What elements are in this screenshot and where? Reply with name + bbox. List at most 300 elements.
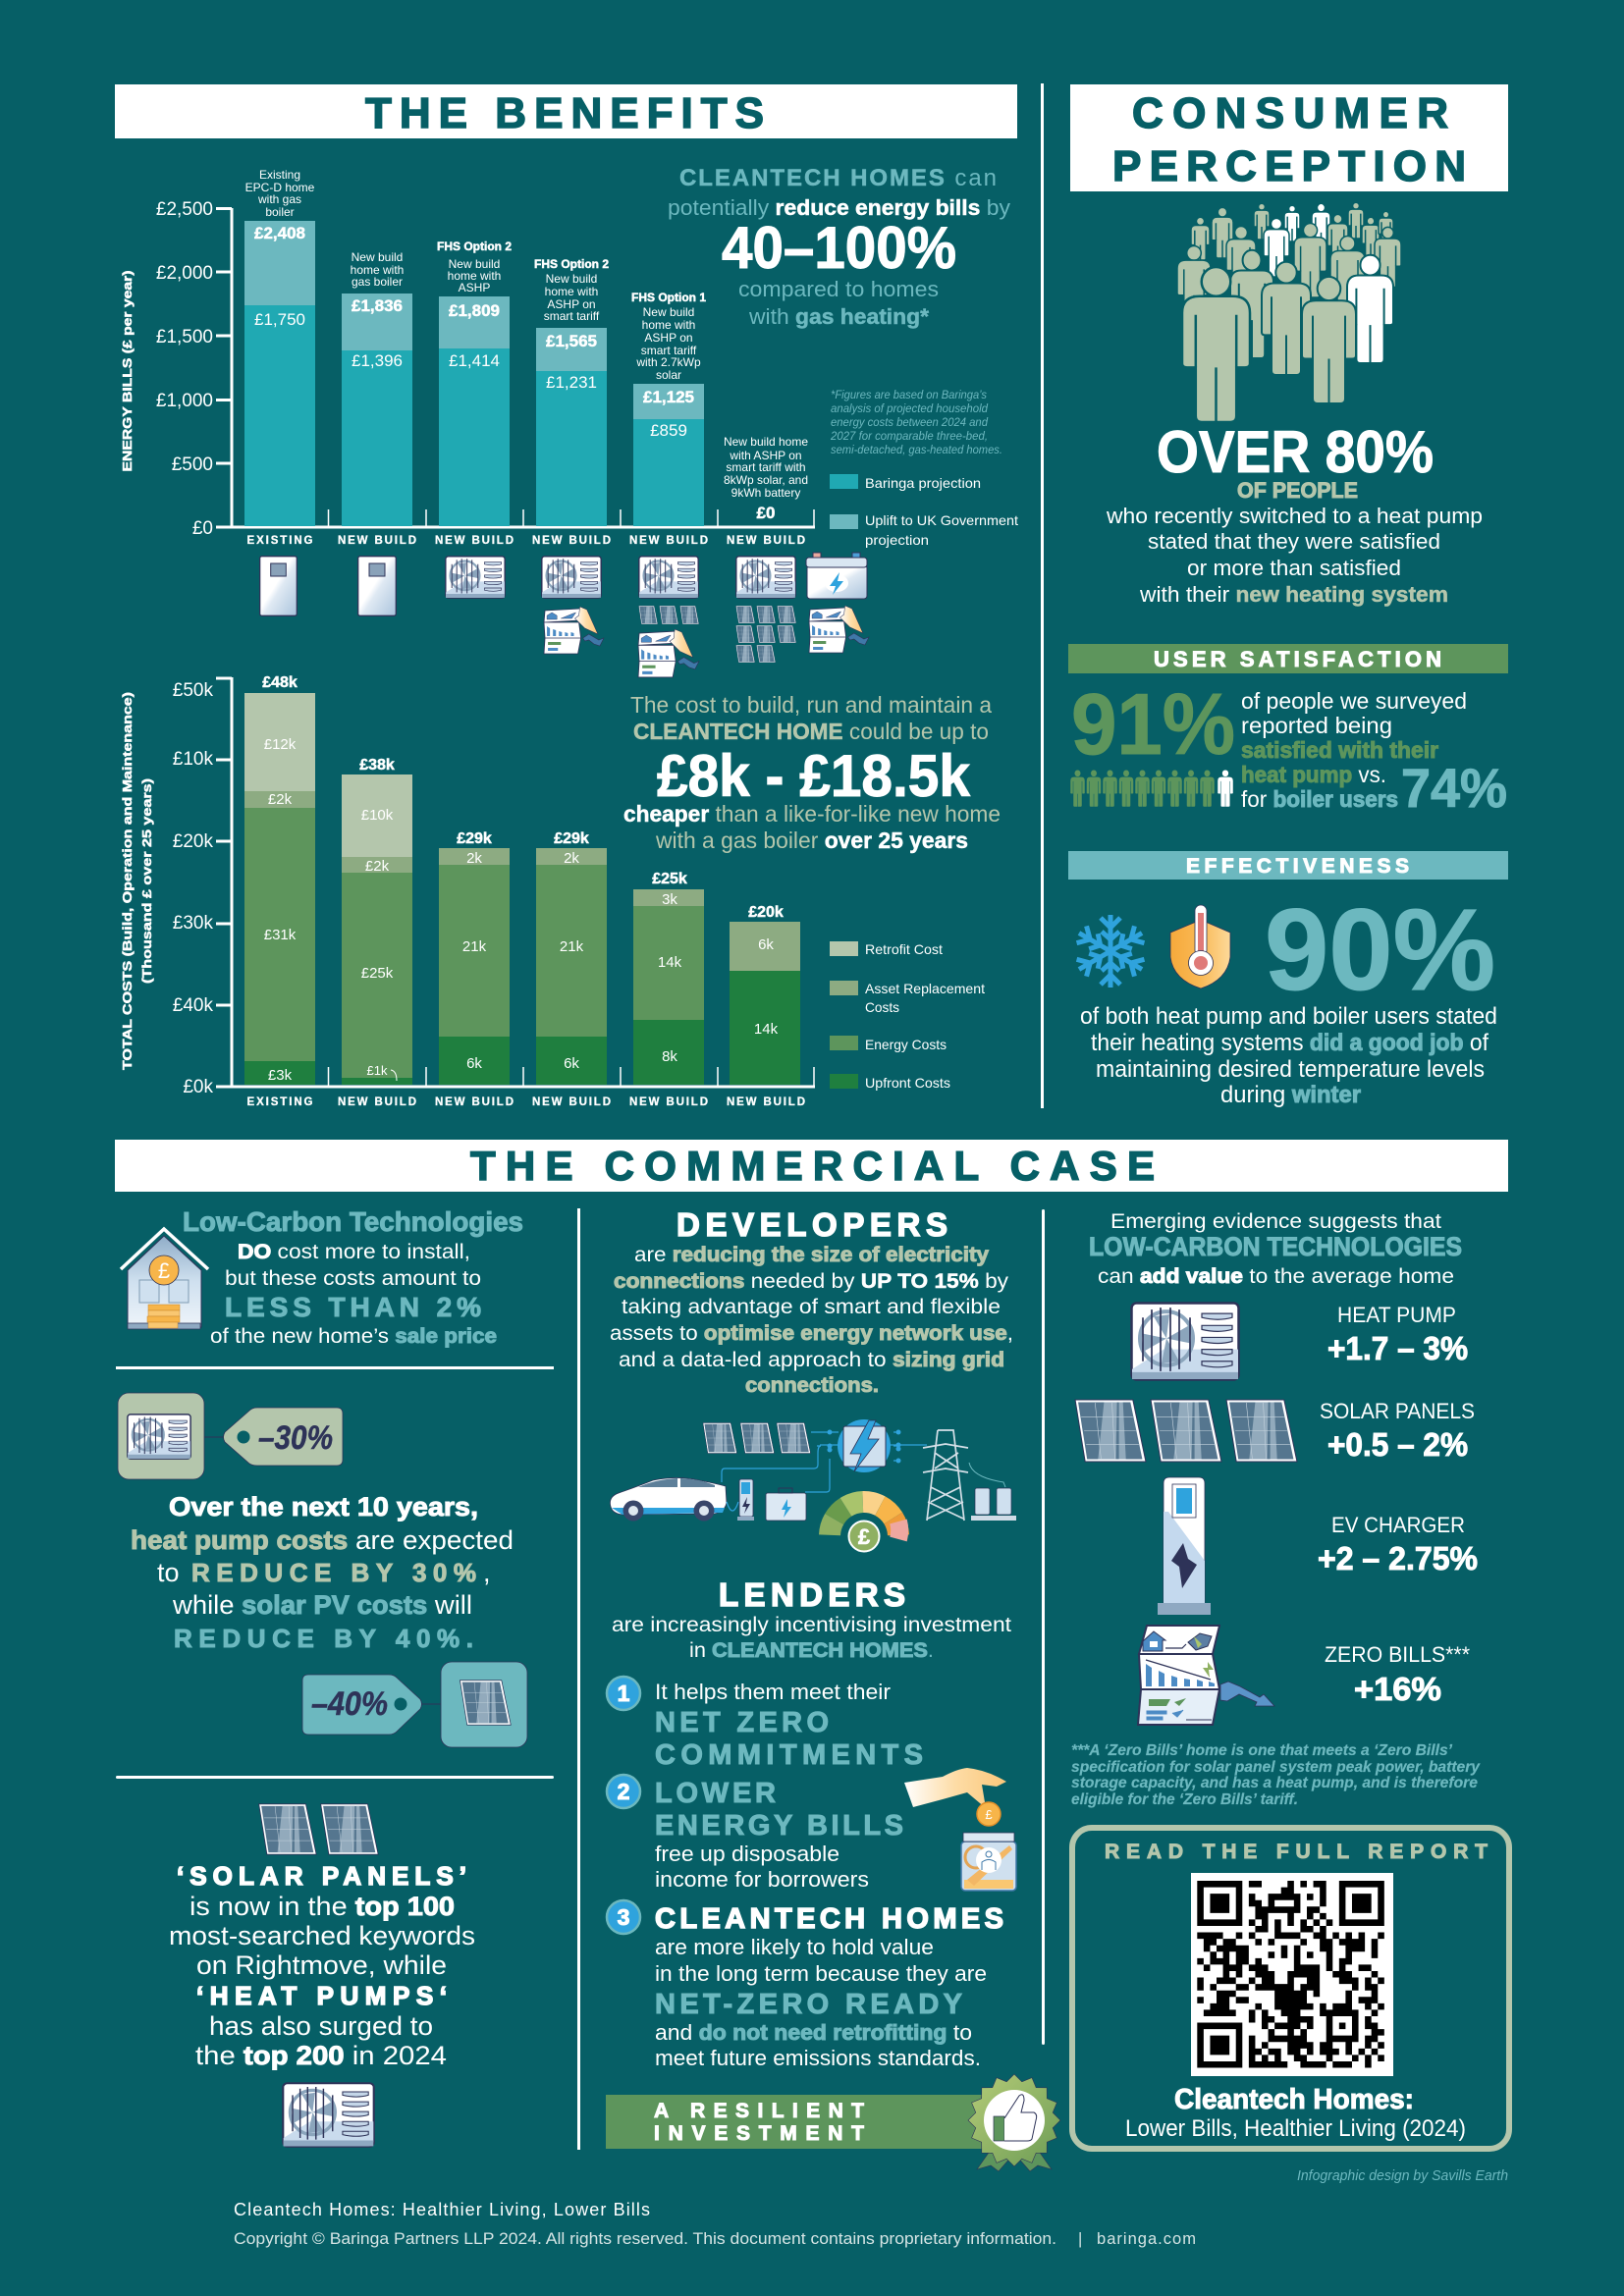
legend: energy bills: Baringa projection [865, 475, 981, 491]
heading: read the full report: READ THE FULL REPORT [1105, 1841, 1488, 1863]
text block: developers: and a data-led approach to sizing grid [619, 1349, 1004, 1371]
text block: low-carbon technologies cost: of the new home’s sale price [210, 1325, 497, 1348]
icon: price tag minus 40 [302, 1675, 441, 1735]
stat: over 80 percent [1106, 419, 1483, 607]
panel: read the full report [1072, 1828, 1509, 2149]
heading: consumer perception [1070, 84, 1508, 191]
bar: existing: £2,408 [254, 224, 305, 242]
bar captions: solar [656, 368, 681, 382]
heading: the commercial case [115, 1140, 1508, 1192]
column: developers and lenders [606, 1206, 1060, 2171]
list item 2: lower energy bills: LOWER [655, 1778, 776, 1809]
x axis labels: NEW BUILD [629, 1096, 708, 1108]
x axis labels: EXISTING [247, 535, 313, 547]
bar captions: FHS Option 2 [437, 240, 512, 253]
text block: rightmove search: is now in the top 100 [189, 1892, 455, 1921]
bar captions: 9kWh battery [731, 486, 800, 500]
icon: savings jar [961, 1833, 1016, 1891]
text block: developers: connections. [745, 1374, 879, 1397]
text block: rightmove search: ‘HEAT PUMPS‘ [196, 1981, 447, 2010]
icon: solar row bar 5 [639, 606, 699, 624]
y axis labels [173, 680, 213, 1097]
footer: Copyright © Baringa Partners LLP 2024. All rights reserved. This document contains proprietary information. [234, 2230, 1056, 2248]
text block: surveyed satisfaction: satisfied with their [1241, 737, 1438, 763]
bar segment values: £1k [367, 1063, 388, 1078]
icon: smart tariff bill 5 [638, 629, 699, 677]
x axis labels: NEW BUILD [727, 1096, 805, 1108]
stat: over 80 percent: with their new heating system [1139, 582, 1448, 607]
stacked bar: new build 1 [342, 774, 412, 1085]
text block: over next 10 years: REDUCE BY 30% [191, 1558, 476, 1587]
text block: cost to build: The cost to build, run and maintain a [630, 692, 992, 718]
bar captions: ASHP on [644, 331, 693, 345]
item: ev charger value [1158, 1477, 1478, 1615]
report title: Lower Bills, Healthier Living (2024) [1125, 2115, 1466, 2142]
bar captions: New build [546, 272, 597, 286]
bar totals: £48k [262, 674, 298, 691]
y axis labels: £50k [173, 680, 213, 701]
text block: developers: are reducing the size of electricity [634, 1244, 989, 1266]
text block: developers: DEVELOPERS [677, 1206, 947, 1243]
item: ev charger value: EV CHARGER [1331, 1513, 1465, 1537]
bar totals: £25k [652, 871, 687, 887]
icon: ten people row [1070, 770, 1233, 807]
footnote: figures basis: 2027 for comparable three-bed, [830, 431, 988, 443]
bar captions: 8kWp solar, and [724, 473, 808, 487]
bar: new build zero: £0 [757, 504, 775, 522]
icon: solar array bar 6 [736, 606, 796, 663]
panel: consumer perception [1068, 84, 1508, 1108]
y axis labels: £1,000 [156, 391, 213, 411]
y axis labels: £20k [173, 831, 213, 852]
list item 2: lower energy bills: ENERGY BILLS [655, 1810, 903, 1842]
stat: over 80 percent: stated that they were satisfied [1148, 529, 1440, 554]
list item 3: hold value: CLEANTECH HOMES [655, 1903, 1003, 1935]
icon: transformers [971, 1488, 1016, 1521]
footnote: zero bills definition: specification for solar panel system peak power, battery [1071, 1759, 1481, 1776]
y axis labels: £40k [173, 995, 213, 1016]
icon: tariff gauge: £ [858, 1524, 871, 1549]
text block: emerging evidence [1089, 1210, 1462, 1288]
banner: a resilient investment: A RESILIENT [654, 2100, 864, 2122]
report title: Cleantech Homes: [1174, 2084, 1414, 2115]
icon: battery [806, 553, 867, 599]
axes [216, 208, 815, 527]
text block: reduce energy bills: CLEANTECH HOMES can [679, 165, 997, 191]
stacked bar: new build 2 [439, 848, 510, 1085]
bar: existing: £1,750 [254, 310, 305, 329]
footnote: figures basis: semi-detached, gas-heated homes. [831, 445, 1002, 456]
footnote: zero bills definition: storage capacity, and has a heat pump, and is therefore [1071, 1775, 1478, 1791]
bar captions: New build [352, 250, 403, 264]
list item 1: net zero commitments: COMMITMENTS [655, 1739, 923, 1771]
text block: cost to build: £8k - £18.5k [657, 743, 971, 809]
divider top [1041, 83, 1044, 1108]
icon: thumbs-up rosette [968, 2074, 1060, 2171]
item: heat pump value [1131, 1303, 1468, 1379]
text block: low-carbon technologies cost: DO cost more to install, [238, 1241, 470, 1263]
list item 2: lower energy bills: free up disposable [655, 1842, 839, 1866]
bar: new build ASHP smart tariff solar: £1,125 [643, 388, 694, 406]
subheading: user satisfaction: USER SATISFACTION [1154, 647, 1441, 671]
y axis labels: £0k [183, 1077, 213, 1097]
bar segment values: 6k [758, 936, 774, 953]
text block: rightmove search: the top 200 in 2024 [195, 2041, 447, 2070]
text block: lenders: LENDERS [719, 1576, 905, 1613]
bar: existing [244, 221, 315, 526]
bar captions: smart tariff [641, 344, 697, 357]
y axis labels: £0 [192, 518, 213, 539]
stacked bar: existing [244, 693, 315, 1085]
icon: price tag minus 30: –30% [258, 1419, 333, 1457]
chart: energy bills bar chart [120, 168, 815, 547]
icons: technology under each bar [260, 553, 869, 677]
icon: snowflake [1074, 915, 1147, 988]
stat: over 80 percent: who recently switched to a heat pump [1106, 504, 1483, 528]
text block: did a good job: their heating systems did a good job of [1091, 1030, 1489, 1056]
footer: | [1078, 2230, 1082, 2248]
item: zero bills value [1138, 1626, 1470, 1725]
y axis labels: £30k [173, 913, 213, 934]
stacked bar: new build 4 [633, 889, 704, 1085]
panel: the benefits [115, 84, 1018, 1108]
footnote: figures basis: *Figures are based on Baringa’s [831, 390, 987, 401]
item: heat pump value: +1.7 – 3% [1327, 1330, 1468, 1366]
legend: energy bills [830, 474, 1018, 548]
list item 2: lower energy bills [607, 1775, 903, 1892]
stat: 91 percent: 91% [1071, 675, 1235, 773]
list item 3: hold value: in the long term because they are [655, 1961, 987, 1986]
stat: over 80 percent: OF PEOPLE [1237, 478, 1358, 503]
report title [1125, 2084, 1466, 2142]
bar captions: ASHP on [547, 297, 596, 311]
bar totals: £20k [748, 904, 784, 921]
item: solar panels value [1075, 1399, 1475, 1463]
footnote: figures basis [830, 390, 1002, 456]
item: zero bills value: +16% [1354, 1671, 1441, 1707]
y axis title: TOTAL COSTS (Build, Operation and Maintenance) [120, 692, 135, 1070]
footnote: zero bills definition: ***A ‘Zero Bills’ home is one that meets a ‘Zero Bills’ [1071, 1742, 1453, 1759]
icon: battery [766, 1488, 806, 1521]
footnote: zero bills definition: eligible for the ‘Zero Bills’ tariff. [1071, 1791, 1298, 1808]
bar: new build gas boiler: £1,836 [352, 296, 403, 315]
icon: house with coins [121, 1229, 208, 1329]
text block: developers: connections needed by UP TO 15% by [614, 1270, 1009, 1293]
heading: the benefits [115, 84, 1017, 138]
bar segment values: £2k [268, 791, 293, 808]
list item 3: hold value: are more likely to hold value [655, 1935, 934, 1959]
heading: the commercial case: THE COMMERCIAL CASE [470, 1143, 1155, 1189]
bar: new build ASHP [439, 296, 510, 526]
bar segment values: £25k [361, 965, 394, 982]
icon: solar tile [441, 1662, 527, 1747]
bar captions: with 2.7kWp [635, 355, 701, 369]
footnote: zero bills definition [1071, 1742, 1481, 1808]
text block: did a good job: maintaining desired temperature levels [1096, 1056, 1485, 1083]
icon: heat pump 5 [639, 557, 698, 598]
icon: price tag minus 40: –40% [311, 1685, 388, 1723]
y axis labels: £1,500 [156, 327, 213, 347]
subheading: effectiveness [1068, 851, 1508, 880]
credit: infographic design: Infographic design by Savills Earth [1297, 2167, 1508, 2184]
y axis labels: £10k [173, 749, 213, 770]
y axis labels: £2,500 [156, 199, 213, 220]
bar segment values: 14k [658, 954, 682, 971]
item: solar panels value: SOLAR PANELS [1320, 1399, 1475, 1423]
bar captions: home with [448, 269, 501, 283]
icon: smart tariff bill 6 [809, 606, 869, 653]
bar captions: EPC-D home [245, 181, 315, 194]
bar segment values: £12k [264, 736, 297, 753]
bar captions: New build [643, 305, 694, 319]
icon: hand dropping coin: £ [985, 1807, 993, 1822]
text block: reduce energy bills: potentially reduce energy bills by [668, 195, 1010, 220]
bar totals: £38k [359, 757, 395, 774]
bar captions: with gas [257, 192, 301, 206]
subheading: user satisfaction [1068, 644, 1508, 673]
bar segment values: 6k [466, 1055, 482, 1072]
text block: cost to build: cheaper than a like-for-like new home [623, 801, 1001, 827]
bar: new build ASHP smart tariff solar: £859 [650, 421, 687, 440]
x axis labels: NEW BUILD [727, 535, 805, 547]
legend: total costs: Asset Replacement [865, 981, 985, 996]
bar segment values: £3k [268, 1067, 293, 1084]
divider: column 1 first [116, 1366, 554, 1369]
text block: over next 10 years: while solar PV costs will [172, 1590, 472, 1620]
x axis labels: NEW BUILD [338, 1096, 416, 1108]
bar segment values: 8k [662, 1048, 677, 1065]
QR code [1191, 1873, 1393, 2076]
text block: rightmove search: most-searched keywords [169, 1921, 475, 1950]
text block: surveyed satisfaction: reported being [1241, 713, 1392, 738]
icon: boiler existing [260, 557, 297, 615]
legend: energy bills: projection [865, 532, 929, 548]
footer: Cleantech Homes: Healthier Living, Lower Bills [234, 2200, 650, 2219]
legend: total costs: Energy Costs [865, 1037, 947, 1052]
column: low-carbon costs [121, 1206, 523, 1348]
bar segment values: 21k [560, 938, 584, 955]
legend: total costs: Costs [865, 999, 899, 1015]
item: ev charger value: +2 – 2.75% [1318, 1540, 1478, 1576]
icon: heat pump [283, 2083, 374, 2147]
x axis labels: NEW BUILD [338, 535, 416, 547]
icon: house with coins: £ [158, 1258, 170, 1283]
column: cost reductions [118, 1393, 527, 1747]
y axis labels: £500 [172, 454, 213, 475]
bar segment values: 3k [662, 891, 677, 908]
bar: new build ASHP: £1,414 [449, 351, 500, 370]
stacked bar: new build 5 [730, 922, 800, 1085]
bar captions: home with [545, 285, 598, 298]
icon: heat pump 6 [736, 557, 795, 598]
y axis title: (Thousand £ over 25 years) [139, 778, 154, 984]
text block: surveyed satisfaction: of people we surveyed [1241, 688, 1467, 714]
text block: reduce energy bills: with gas heating* [748, 304, 929, 329]
bar segment values: 14k [754, 1021, 779, 1038]
text block: lenders [612, 1576, 1011, 1662]
subheading: effectiveness: EFFECTIVENESS [1186, 855, 1409, 878]
chart: total costs stacked bar chart [120, 674, 815, 1108]
stat: over 80 percent: or more than satisfied [1187, 556, 1401, 580]
column: added value [1071, 1210, 1509, 2184]
bar: new build gas boiler [342, 294, 412, 526]
bar captions: boiler [265, 205, 295, 219]
text block: emerging evidence: LOW-CARBON TECHNOLOGIES [1089, 1232, 1462, 1261]
axes [216, 677, 815, 1087]
list item 3: hold value [607, 1900, 1003, 2070]
stat: 74 percent: 74% [1401, 757, 1507, 819]
y axis title: ENERGY BILLS (£ per year) [120, 271, 135, 471]
text block: developers: taking advantage of smart and flexible [622, 1296, 1001, 1318]
text block: surveyed satisfaction: heat pump vs. [1241, 762, 1386, 787]
text block: did a good job [1080, 1003, 1497, 1108]
divider: between column 2 and 3 [1042, 1209, 1045, 2045]
bar totals [262, 674, 784, 921]
bar captions: smart tariff with [726, 460, 806, 474]
footnote: figures basis: analysis of projected household [831, 403, 989, 415]
icon: ev charger [727, 1479, 754, 1521]
list item 2: lower energy bills: 2 [618, 1779, 629, 1804]
arrow: 1k pointer [391, 1070, 397, 1081]
bar: new build gas boiler: £1,396 [352, 351, 403, 370]
legend: total costs: Retrofit Cost [865, 941, 943, 957]
bar totals: £29k [457, 830, 492, 847]
footnote: figures basis: energy costs between 2024 and [831, 417, 989, 429]
wires [722, 1432, 927, 1492]
x axis labels: NEW BUILD [532, 535, 611, 547]
y axis title [120, 692, 154, 1070]
list item 3: hold value: meet future emissions standards. [655, 2046, 981, 2070]
column: rightmove keywords [169, 1804, 475, 2147]
bar: new build ASHP smart tariff: £1,231 [546, 373, 597, 392]
text block: cost to build: CLEANTECH HOME could be up to [633, 719, 989, 744]
banner: a resilient investment: INVESTMENT [654, 2122, 864, 2145]
y axis labels: £2,000 [156, 263, 213, 284]
text block: emerging evidence: can add value to the average home [1098, 1265, 1454, 1288]
icon: smart tariff bill 4 [544, 607, 604, 654]
text block: rightmove search [169, 1861, 475, 2070]
icon: heat pump 3 [446, 557, 505, 598]
text block: rightmove search: has also surged to [209, 2011, 433, 2041]
legend: total costs: Upfront Costs [865, 1075, 950, 1091]
icon: shield with thermometer [1170, 905, 1230, 988]
list item 1: net zero commitments [607, 1677, 923, 1771]
text block: reduce energy bills [668, 165, 1010, 329]
bar segment values: £2k [365, 858, 390, 875]
text block: low-carbon technologies cost: but these costs amount to [225, 1267, 481, 1290]
legend: total costs [830, 941, 985, 1091]
text block: lenders: are increasingly incentivising investment [612, 1614, 1011, 1636]
list item 2: lower energy bills: income for borrowers [655, 1867, 869, 1892]
icon: boiler new build [358, 557, 396, 615]
stacked bar: new build 3 [536, 848, 607, 1085]
text block: rightmove search: on Rightmove, while [196, 1950, 447, 1980]
bar captions: ASHP [459, 281, 490, 294]
bar captions: FHS Option 1 [631, 291, 706, 304]
bar: new build ASHP smart tariff [536, 328, 607, 526]
icon: crowd of people [1177, 202, 1401, 422]
x axis labels: NEW BUILD [435, 1096, 514, 1108]
item: solar panels value: +0.5 – 2% [1327, 1426, 1468, 1463]
list item 1: net zero commitments: It helps them meet their [655, 1680, 891, 1704]
bar captions: FHS Option 2 [534, 257, 609, 271]
text block: reduce energy bills: compared to homes [738, 277, 939, 301]
bar: new build ASHP smart tariff: £1,565 [546, 332, 597, 350]
divider: between column 1 and 2 [577, 1208, 580, 2150]
text block: over next 10 years: Over the next 10 years, [169, 1492, 478, 1522]
bar captions: home with [642, 318, 695, 332]
text block: did a good job: of both heat pump and boiler users stated [1080, 1003, 1497, 1030]
text block: over next 10 years: REDUCE BY 40%. [174, 1624, 473, 1653]
icon: price tag minus 30 [204, 1408, 343, 1466]
icon: hand dropping coin [904, 1768, 1006, 1826]
heading: consumer perception: PERCEPTION [1112, 142, 1466, 190]
bar segment values: 2k [466, 850, 482, 867]
list item 3: hold value: NET-ZERO READY [655, 1989, 962, 2020]
text block: surveyed satisfaction [1241, 688, 1467, 812]
text block: over next 10 years: heat pump costs are expected [131, 1525, 514, 1555]
divider: column 1 second [116, 1776, 554, 1779]
x axis labels: NEW BUILD [435, 535, 514, 547]
stat: 90 percent: 90% [1265, 885, 1495, 1015]
bar segment values: 6k [564, 1055, 579, 1072]
text block: cost to build: with a gas boiler over 25 years [655, 828, 968, 853]
footer [234, 2200, 1196, 2248]
x axis labels [247, 1096, 805, 1108]
y axis labels [156, 199, 213, 539]
text block: low-carbon technologies cost [183, 1206, 523, 1348]
icon: heat pump 4 [542, 557, 601, 598]
bar captions: Existing [259, 168, 300, 182]
bar captions: smart tariff [544, 309, 600, 323]
bar captions: New build home [724, 435, 808, 449]
bar: new build ASHP: £1,809 [449, 301, 500, 320]
bar captions: New build [449, 257, 500, 271]
text block: reduce energy bills: 40–100% [722, 215, 956, 281]
text block: over next 10 years [131, 1492, 514, 1653]
list item 3: hold value: and do not need retrofitting to [655, 2020, 972, 2045]
bar totals: £29k [554, 830, 589, 847]
bar captions [245, 168, 808, 500]
bar captions: gas boiler [352, 275, 403, 289]
bar segment values: 21k [462, 938, 487, 955]
text block: lenders: in CLEANTECH HOMES . [689, 1639, 934, 1662]
bar segment values: £31k [264, 927, 297, 943]
text block: cost to build [623, 692, 1001, 853]
text block: low-carbon technologies cost: LESS THAN 2% [225, 1292, 481, 1322]
bar: new build ASHP smart tariff solar [633, 384, 704, 526]
banner: a resilient investment [606, 2095, 985, 2149]
x axis labels: EXISTING [247, 1096, 313, 1108]
icon: heat pump tile [118, 1393, 204, 1479]
icon: electric car [610, 1478, 727, 1522]
list item 1: net zero commitments: 1 [618, 1681, 630, 1706]
bar segment values: 2k [564, 850, 579, 867]
text block: surveyed satisfaction: for boiler users [1241, 786, 1398, 812]
item: zero bills value: ZERO BILLS*** [1325, 1642, 1470, 1667]
icon: tariff gauge [830, 1502, 899, 1551]
x axis labels: NEW BUILD [629, 535, 708, 547]
illustration: smart energy network [610, 1419, 1016, 1551]
bar segment values [264, 736, 779, 1084]
text block: low-carbon technologies cost: Low-Carbon Technologies [183, 1206, 523, 1237]
text block: did a good job: during winter [1220, 1082, 1361, 1108]
list item 1: net zero commitments: NET ZERO [655, 1707, 829, 1738]
text block: over next 10 years: to [157, 1558, 180, 1587]
x axis labels: NEW BUILD [532, 1096, 611, 1108]
footer: baringa.com [1097, 2230, 1196, 2248]
bar captions: with ASHP on [729, 449, 802, 462]
